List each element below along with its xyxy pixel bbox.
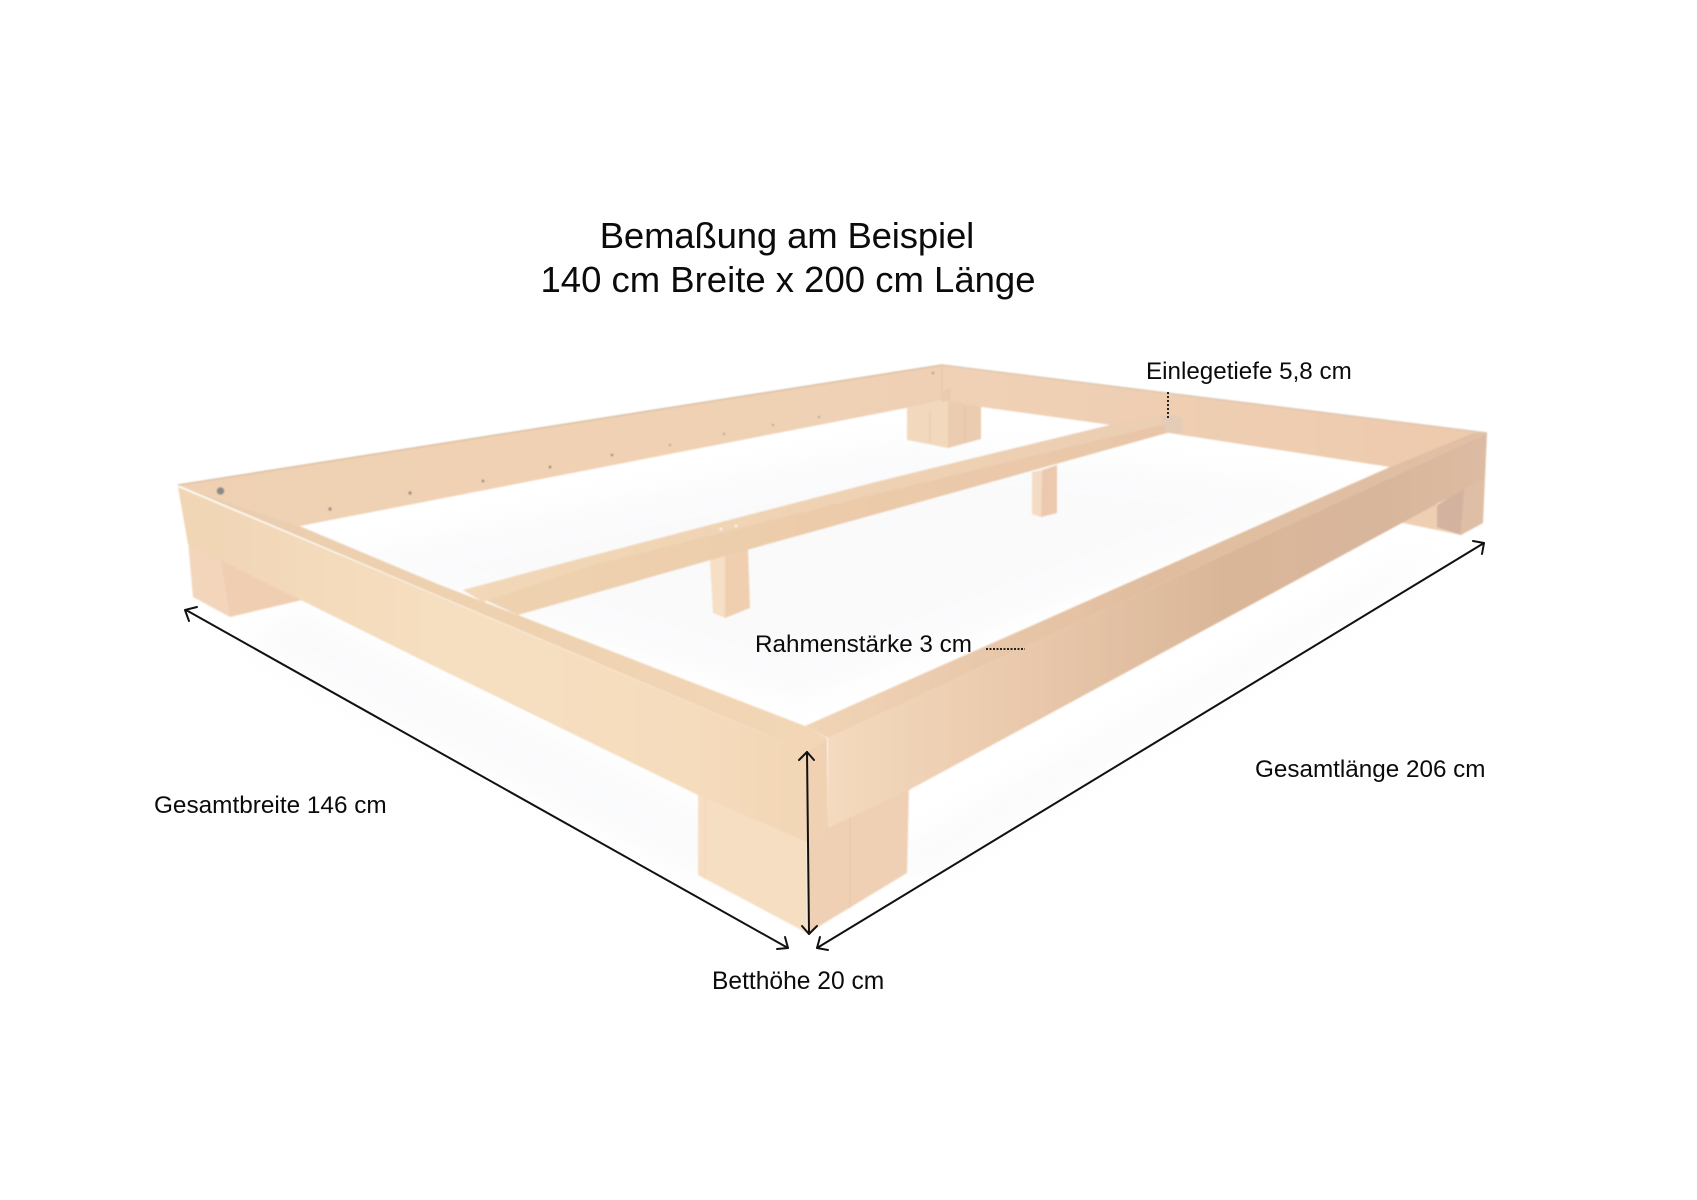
- title: 140 cm Breite x 200 cm Länge: [540, 259, 1036, 300]
- dimension arrow: Betthöhe: [799, 752, 817, 934]
- leg: rear right: [1380, 478, 1485, 535]
- label: Betthöhe: Betthöhe 20 cm: [712, 968, 884, 995]
- rail: back left: [178, 365, 942, 526]
- beam end cap: [1160, 415, 1182, 433]
- leg: front corner: [698, 785, 909, 933]
- centre beam legs: [710, 465, 1057, 618]
- title: Bemaßung am Beispiel: [600, 215, 974, 256]
- rail: rear right: [942, 365, 1487, 467]
- label: Einlegetiefe: Einlegetiefe 5,8 cm: [1146, 358, 1352, 385]
- bed frame: [178, 365, 1487, 933]
- rail: front left: [178, 485, 827, 842]
- dotted leader: Einlegetiefe: [1167, 392, 1169, 418]
- centre beam: [463, 415, 1182, 615]
- corner post: [807, 738, 828, 842]
- rail: right side: [805, 433, 1487, 828]
- dimension arrow: Gesamtbreite: [185, 607, 788, 949]
- floor shadows: [240, 440, 1440, 880]
- label: Gesamtlänge: Gesamtlänge 206 cm: [1255, 756, 1486, 783]
- label: Gesamtbreite: Gesamtbreite 146 cm: [154, 792, 387, 819]
- dotted leader: Rahmenstärke: [986, 648, 1025, 650]
- screw holes: [217, 372, 934, 511]
- dimension arrow: Gesamtlänge: [817, 541, 1484, 950]
- leg: rear left: [188, 541, 302, 617]
- leg: back block: [907, 400, 981, 448]
- corner bracket: [942, 388, 951, 402]
- label: Rahmenstärke: Rahmenstärke 3 cm: [755, 631, 972, 658]
